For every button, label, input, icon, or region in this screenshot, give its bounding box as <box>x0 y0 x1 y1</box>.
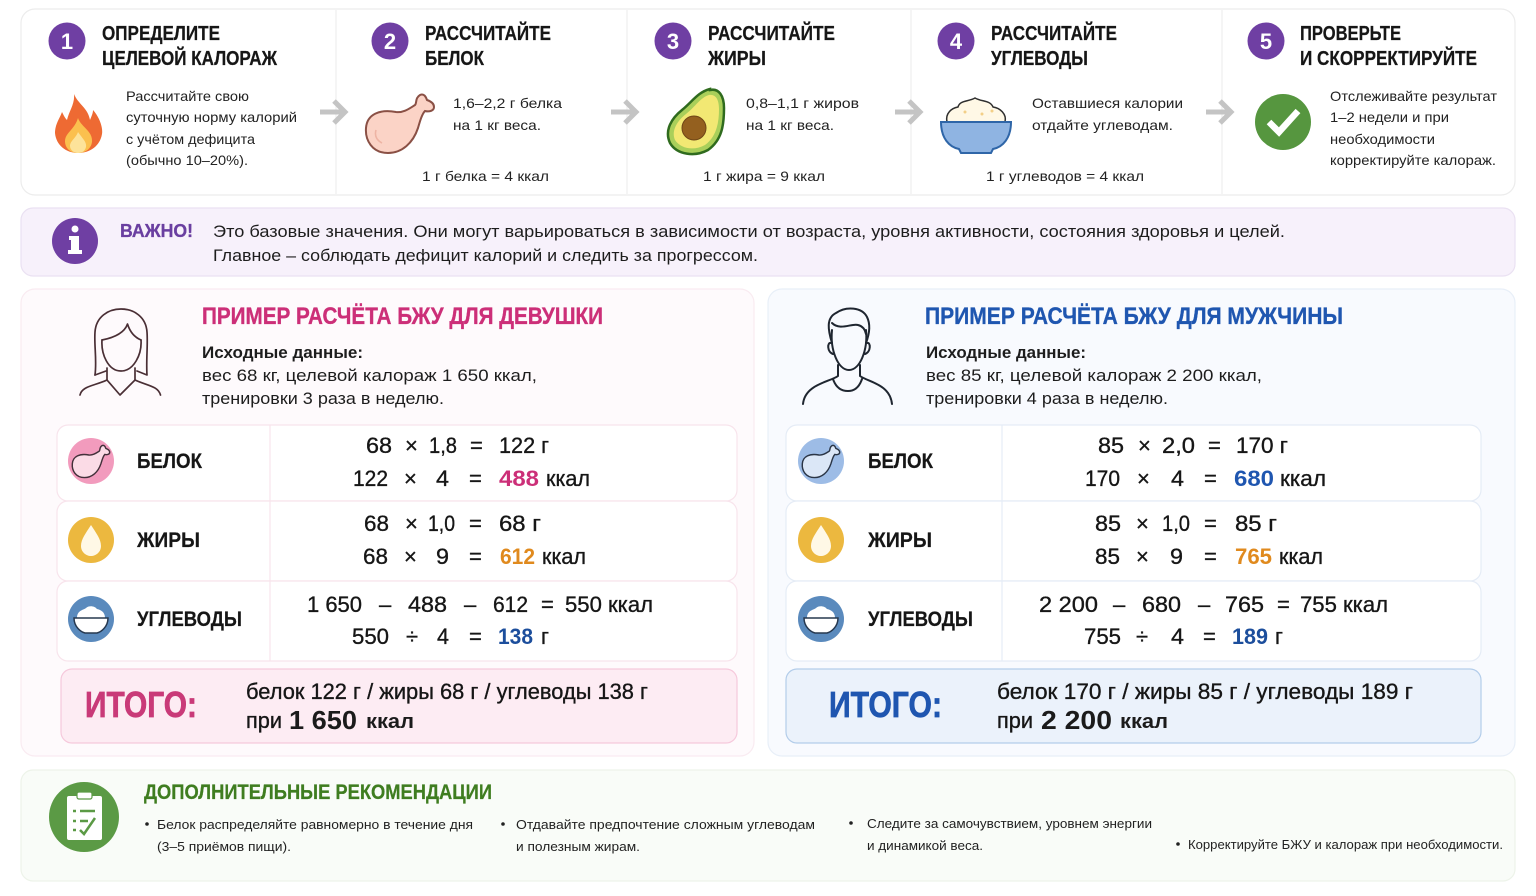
calculation: woman protein: = <box>469 466 482 491</box>
step 5 <box>1248 22 1498 168</box>
text: step 2 description: 1,6–2,2 г белка <box>453 95 562 111</box>
calculation: woman carbs: = <box>541 592 554 617</box>
panel: additional recommendations <box>21 770 1515 881</box>
text: step 2 description: на 1 кг веса. <box>453 117 541 133</box>
calculation: man protein <box>1085 433 1326 491</box>
calculation: man carbs: 755 ккал <box>1300 592 1388 617</box>
recommendation 2 <box>501 817 815 854</box>
text: step 3 description: 1 г жира = 9 ккал <box>703 168 825 184</box>
arrow 1 <box>320 101 345 123</box>
text: step 1 description <box>126 88 297 168</box>
total: man: 2 200 <box>1041 705 1112 735</box>
text: man source data: вес 85 кг, целевой калораж 2 200 ккал, <box>926 366 1262 385</box>
calculation: man protein: 4 <box>1171 466 1184 491</box>
calculation: man protein: 170 <box>1085 466 1120 491</box>
calculation: woman protein <box>353 433 590 491</box>
text: woman source data: вес 68 кг, целевой калораж 1 650 ккал, <box>202 366 537 385</box>
icon: pink chicken leg <box>68 438 114 484</box>
recommendation 3: Следите за самочувствием, уровнем энергии <box>867 816 1152 831</box>
row: man protein <box>786 425 1481 501</box>
calculation: man fat: 85 г <box>1235 511 1277 536</box>
text: man source data <box>926 343 1262 408</box>
calculation: man protein: = <box>1208 433 1221 458</box>
arrow 3 <box>895 101 920 123</box>
row: man carbs: УГЛЕВОДЫ <box>868 608 973 631</box>
calculation: woman carbs: – <box>379 592 392 617</box>
panel: example for woman <box>21 289 754 756</box>
total: woman: ИТОГО: <box>85 684 197 725</box>
total: man: белок 170 г / жиры 85 г / углеводы 189 г <box>997 679 1413 704</box>
calculation: woman fat: 9 <box>436 544 449 569</box>
text: step 3 description: на 1 кг веса. <box>746 117 834 133</box>
calculation: man protein: 680 <box>1234 466 1274 491</box>
calculation: man fat: = <box>1204 544 1217 569</box>
calculation: woman carbs: г <box>541 624 549 649</box>
calculation: man carbs <box>1039 592 1388 649</box>
calculation: woman protein: = <box>470 433 483 458</box>
calculation: man protein: 2,0 <box>1162 433 1195 458</box>
calculation: woman carbs: – <box>464 592 477 617</box>
calculation: woman protein: ккал <box>546 466 590 491</box>
calculation: woman carbs: 550 ккал <box>565 592 653 617</box>
text: step 1 description: Рассчитайте свою <box>126 88 249 104</box>
text: step 3 description <box>703 95 859 184</box>
calculation: man carbs: 680 <box>1142 592 1181 617</box>
text: important message <box>213 222 1285 265</box>
calculation: woman carbs: ÷ <box>406 624 418 649</box>
calculation: woman carbs: 4 <box>437 624 449 649</box>
recommendation 2: Отдавайте предпочтение сложным углеводам <box>516 817 815 832</box>
calculation: man carbs: – <box>1198 592 1211 617</box>
calculation: woman protein: 122 <box>353 466 388 491</box>
icon: rice bowl <box>941 98 1011 153</box>
step 5: ПРОВЕРЬТЕ <box>1300 23 1401 45</box>
recommendation 1 <box>145 817 473 854</box>
calculation: man fat: 765 <box>1235 544 1272 569</box>
heading: recommendations: ДОПОЛНИТЕЛЬНЫЕ РЕКОМЕНДАЦИИ <box>144 781 492 804</box>
calculation: man protein: = <box>1204 466 1217 491</box>
text: man source data: Исходные данные: <box>926 343 1086 362</box>
calculation: man fat: = <box>1204 511 1217 536</box>
step 5: И СКОРРЕКТИРУЙТЕ <box>1300 46 1477 70</box>
calculation: man carbs: г <box>1275 624 1283 649</box>
step 1 <box>48 22 297 168</box>
row: woman protein: БЕЛОК <box>137 450 202 473</box>
calculation: man fat: 85 <box>1095 544 1120 569</box>
calculation: man protein: 85 <box>1098 433 1124 458</box>
calculation: woman protein: 488 <box>499 466 539 491</box>
arrow 4 <box>1206 101 1231 123</box>
calculation: man carbs: 189 <box>1232 624 1268 649</box>
text: woman source data: Исходные данные: <box>202 343 363 362</box>
calculation: woman carbs: 550 <box>352 624 389 649</box>
total: woman <box>61 669 737 743</box>
step 1: 1 <box>61 29 73 54</box>
text: step 1 description: суточную норму калорий <box>126 109 297 125</box>
icon: clipboard <box>49 782 119 852</box>
calculation: woman fat: × <box>404 544 417 569</box>
step 4 <box>938 21 1183 184</box>
step 3 <box>654 21 859 184</box>
calculation: man carbs: = <box>1203 624 1216 649</box>
recommendation 2: и полезным жирам. <box>516 839 640 854</box>
total: woman: белок 122 г / жиры 68 г / углеводы 138 г <box>246 679 648 704</box>
calculation: woman fat: 68 г <box>499 511 541 536</box>
calculation: man carbs: = <box>1277 592 1290 617</box>
calculation: woman carbs: 1 650 <box>307 592 362 617</box>
text: important message: Главное – соблюдать дефицит калорий и следить за прогрессом. <box>213 246 758 265</box>
calculation: man carbs: 4 <box>1171 624 1184 649</box>
calculation: man carbs: ÷ <box>1136 624 1148 649</box>
icon: blue rice bowl <box>68 596 114 642</box>
heading: woman example: ПРИМЕР РАСЧЁТА БЖУ ДЛЯ ДЕВУШКИ <box>202 303 603 330</box>
step 2: 2 <box>384 29 396 54</box>
calculation: man fat: × <box>1136 511 1149 536</box>
row: man protein: БЕЛОК <box>868 450 933 473</box>
calculation: man protein: × <box>1137 466 1150 491</box>
text: step 5 description: необходимости <box>1330 131 1435 147</box>
icon: blue chicken leg <box>798 438 844 484</box>
recommendation 4: Корректируйте БЖУ и калораж при необходимости. <box>1188 837 1503 852</box>
panel: five steps <box>21 9 1515 195</box>
calculation: woman fat: 68 <box>364 511 389 536</box>
icon: blue rice bowl <box>798 596 844 642</box>
calculation: man fat: 9 <box>1170 544 1183 569</box>
calculation: woman protein: × <box>405 433 418 458</box>
calculation: woman protein: 1,8 <box>429 433 457 458</box>
calculation: man protein: × <box>1138 433 1151 458</box>
calculation: man carbs: – <box>1113 592 1126 617</box>
total: woman: 1 650 <box>289 705 357 735</box>
row: man carbs <box>786 581 1481 661</box>
calculation: woman carbs: = <box>469 624 482 649</box>
total: man <box>786 669 1481 743</box>
calculation: man fat: × <box>1136 544 1149 569</box>
recommendation 3 <box>849 816 1152 853</box>
text: step 4 description: отдайте углеводам. <box>1032 117 1173 133</box>
text: step 5 description: 1–2 недели и при <box>1330 109 1449 125</box>
calculation: woman fat: 612 <box>500 544 535 569</box>
arrow 2 <box>611 101 636 123</box>
icon: check mark <box>1255 94 1311 150</box>
step 2: БЕЛОК <box>425 48 485 70</box>
text: step 3 description: 0,8–1,1 г жиров <box>746 95 859 111</box>
callout: important <box>21 208 1515 276</box>
calculation: woman fat: × <box>405 511 418 536</box>
icon: yellow oil drop <box>68 517 114 563</box>
text: step 1 description: (обычно 10–20%). <box>126 152 248 168</box>
total: woman: ккал <box>366 711 414 733</box>
calculation: woman fat: = <box>469 544 482 569</box>
step 5: 5 <box>1260 29 1272 54</box>
step 4: РАССЧИТАЙТЕ <box>991 21 1117 45</box>
row: woman fat <box>57 501 737 581</box>
icon: woman avatar <box>80 309 160 395</box>
row: woman carbs: УГЛЕВОДЫ <box>137 608 242 631</box>
text: step 1 description: с учётом дефицита <box>126 131 255 147</box>
calculation: man carbs: 765 <box>1225 592 1264 617</box>
calculation: woman fat: 1,0 <box>428 511 455 536</box>
text: step 5 description: корректируйте калораж. <box>1330 152 1496 168</box>
icon: man avatar <box>803 308 892 404</box>
text: step 4 description: 1 г углеводов = 4 ккал <box>986 168 1144 184</box>
text: important message: Это базовые значения. Они могут варьироваться в зависимости от возраста, уровня активности, состояния здоровья и целей. <box>213 222 1285 241</box>
text: woman source data: тренировки 3 раза в неделю. <box>202 389 444 408</box>
row: woman protein <box>57 425 737 501</box>
calculation: woman fat <box>363 511 586 569</box>
step 1: ЦЕЛЕВОЙ КАЛОРАЖ <box>102 46 278 70</box>
icon: chicken leg <box>366 94 434 153</box>
calculation: woman carbs <box>307 592 653 649</box>
calculation: woman fat: = <box>469 511 482 536</box>
panel: example for man <box>768 289 1515 756</box>
text: woman source data <box>202 343 537 408</box>
calculation: woman protein: 68 <box>366 433 392 458</box>
calculation: woman fat: 68 <box>363 544 388 569</box>
step 2 <box>366 21 562 184</box>
calculation: woman carbs: 138 <box>498 624 533 649</box>
calculation: man protein: 170 г <box>1236 433 1288 458</box>
calculation: man fat: ккал <box>1279 544 1323 569</box>
step 1: ОПРЕДЕЛИТЕ <box>102 23 220 45</box>
calculation: man carbs: 2 200 <box>1039 592 1098 617</box>
calculation: woman carbs: 612 <box>493 592 528 617</box>
total: man: ккал <box>1120 711 1168 733</box>
calculation: woman fat: ккал <box>542 544 586 569</box>
calculation: woman protein: 122 г <box>499 433 549 458</box>
total: woman: при <box>246 708 282 733</box>
text: man source data: тренировки 4 раза в неделю. <box>926 389 1168 408</box>
text: step 2 description <box>422 95 562 184</box>
step 2: РАССЧИТАЙТЕ <box>425 21 551 45</box>
calculation: man fat: 1,0 <box>1162 511 1190 536</box>
calculation: man fat <box>1095 511 1323 569</box>
calculation: man fat: 85 <box>1095 511 1121 536</box>
recommendation 1: (3–5 приёмов пищи). <box>157 839 291 854</box>
row: man fat <box>786 501 1481 581</box>
step 3: 3 <box>667 29 679 54</box>
step 3: ЖИРЫ <box>707 48 766 70</box>
icon: yellow oil drop <box>798 517 844 563</box>
text: important heading: ВАЖНО! <box>120 221 193 241</box>
row: woman carbs <box>57 581 737 661</box>
total: man: при <box>997 708 1033 733</box>
row: woman fat: ЖИРЫ <box>136 529 200 552</box>
recommendation 1: Белок распределяйте равномерно в течение дня <box>157 817 473 832</box>
text: step 4 description <box>986 95 1183 184</box>
icon: info <box>52 218 98 264</box>
text: step 5 description: Отслеживайте результат <box>1330 88 1498 104</box>
calculation: woman carbs: 488 <box>408 592 447 617</box>
row: man fat: ЖИРЫ <box>867 529 932 552</box>
calculation: man carbs: 755 <box>1084 624 1121 649</box>
total: man: ИТОГО: <box>829 684 942 725</box>
calculation: man protein: ккал <box>1280 466 1326 491</box>
step 3: РАССЧИТАЙТЕ <box>708 21 835 45</box>
step 4: 4 <box>950 29 963 54</box>
text: step 4 description: Оставшиеся калории <box>1032 95 1183 111</box>
calculation: woman protein: 4 <box>436 466 449 491</box>
calculation: woman protein: × <box>404 466 417 491</box>
recommendation 3: и динамикой веса. <box>867 838 983 853</box>
icon: flame <box>55 94 102 153</box>
heading: man example: ПРИМЕР РАСЧЁТА БЖУ ДЛЯ МУЖЧИНЫ <box>925 303 1343 330</box>
step 4: УГЛЕВОДЫ <box>991 48 1088 70</box>
icon: avocado <box>668 89 724 154</box>
text: step 5 description <box>1330 88 1498 168</box>
text: step 2 description: 1 г белка = 4 ккал <box>422 168 549 184</box>
